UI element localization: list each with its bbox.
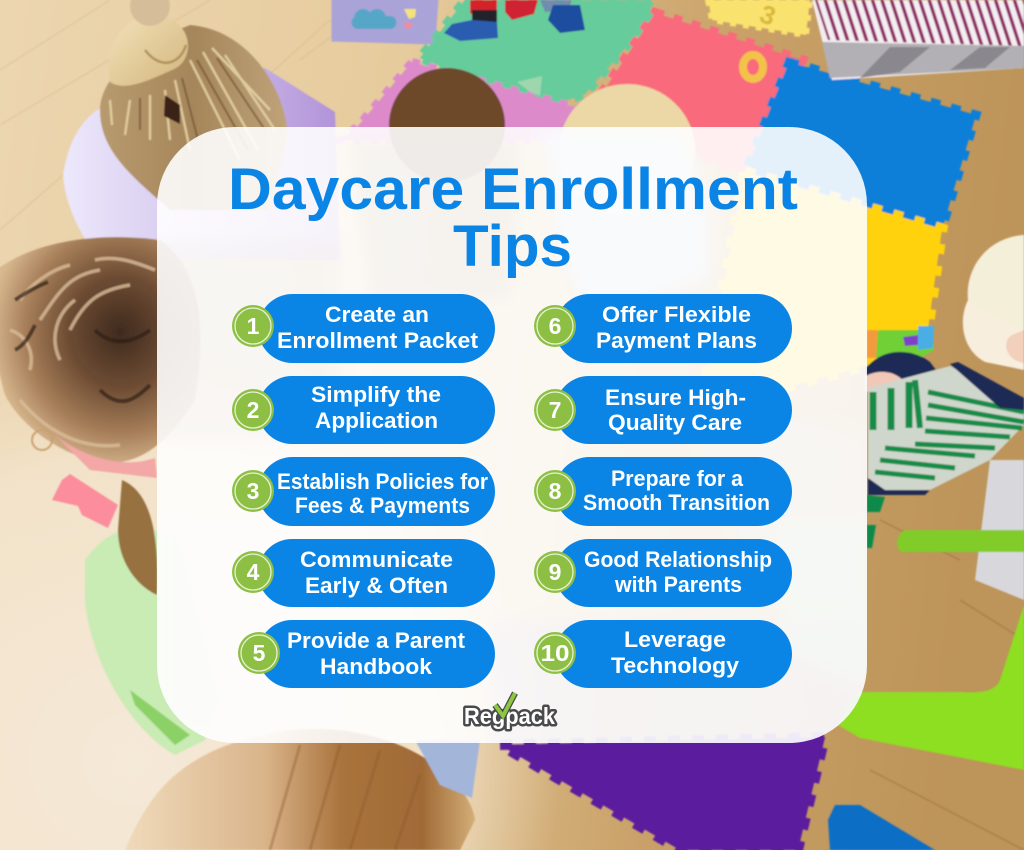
tip 5: 5 [253,640,266,666]
title: Daycare Enrollment [228,157,798,222]
tip 9 [534,539,792,607]
tip 6: Offer Flexible [602,302,751,327]
tip 9: Good Relationship [584,547,772,572]
tip 10 [534,620,792,688]
tip 9: with Parents [614,572,742,597]
tip 1: Create an [325,302,429,327]
top-left girl [63,68,340,260]
tip 7 [534,376,792,444]
tip 2 [232,376,495,444]
tip 4: Communicate [300,547,453,572]
logo: Regpack [464,693,555,729]
tip 10: Leverage [624,627,726,652]
tip 5: Handbook [320,654,433,679]
heads above panel [389,68,505,182]
tip 3: Establish Policies for [277,469,488,494]
tip 1 [232,294,495,363]
tip 1: Enrollment Packet [277,328,479,353]
tip 5 [238,620,495,688]
tip 3: 3 [247,478,259,504]
tip 4: 4 [247,559,260,585]
tip 4: Early & Often [305,573,448,598]
left curly head [0,237,200,463]
tip 6 [534,294,792,363]
green toy truck [868,325,934,358]
tip 7: Ensure High- [605,385,746,410]
tip 1: 1 [247,313,260,339]
right child [866,352,945,392]
mat tiles [333,0,437,43]
tip 7: 7 [549,397,561,423]
child's legs at top [470,0,497,14]
tip 3: Fees & Payments [295,493,470,518]
tip 9: 9 [549,559,561,585]
children and mat seen through the panel [551,141,867,742]
tip 7: Quality Care [608,410,742,435]
tip 4 [232,539,495,607]
logo: Regpack: Regpack [464,703,555,729]
tip 8: Smooth Transition [583,490,770,515]
tip 8: Prepare for a [611,466,744,491]
tip 10: Technology [611,653,740,678]
tip 6: Payment Plans [596,328,757,353]
translucent white panel [157,127,867,743]
bottom head [125,729,475,850]
tip 6: 6 [549,313,561,339]
tip 3 [232,457,495,526]
tip 8 [534,457,792,526]
blue toy [828,805,935,850]
tip 2: 2 [247,397,259,423]
tip 2: Simplify the [311,382,441,407]
tip 5: Provide a Parent [287,628,466,653]
title [228,157,798,279]
grey box [975,460,1024,600]
tip 10: 10 [540,640,570,666]
bedding [812,0,1024,80]
title: Tips [453,214,572,279]
tip 2: Application [315,408,438,433]
green chair [897,530,1024,552]
tip 8: 8 [549,478,562,504]
